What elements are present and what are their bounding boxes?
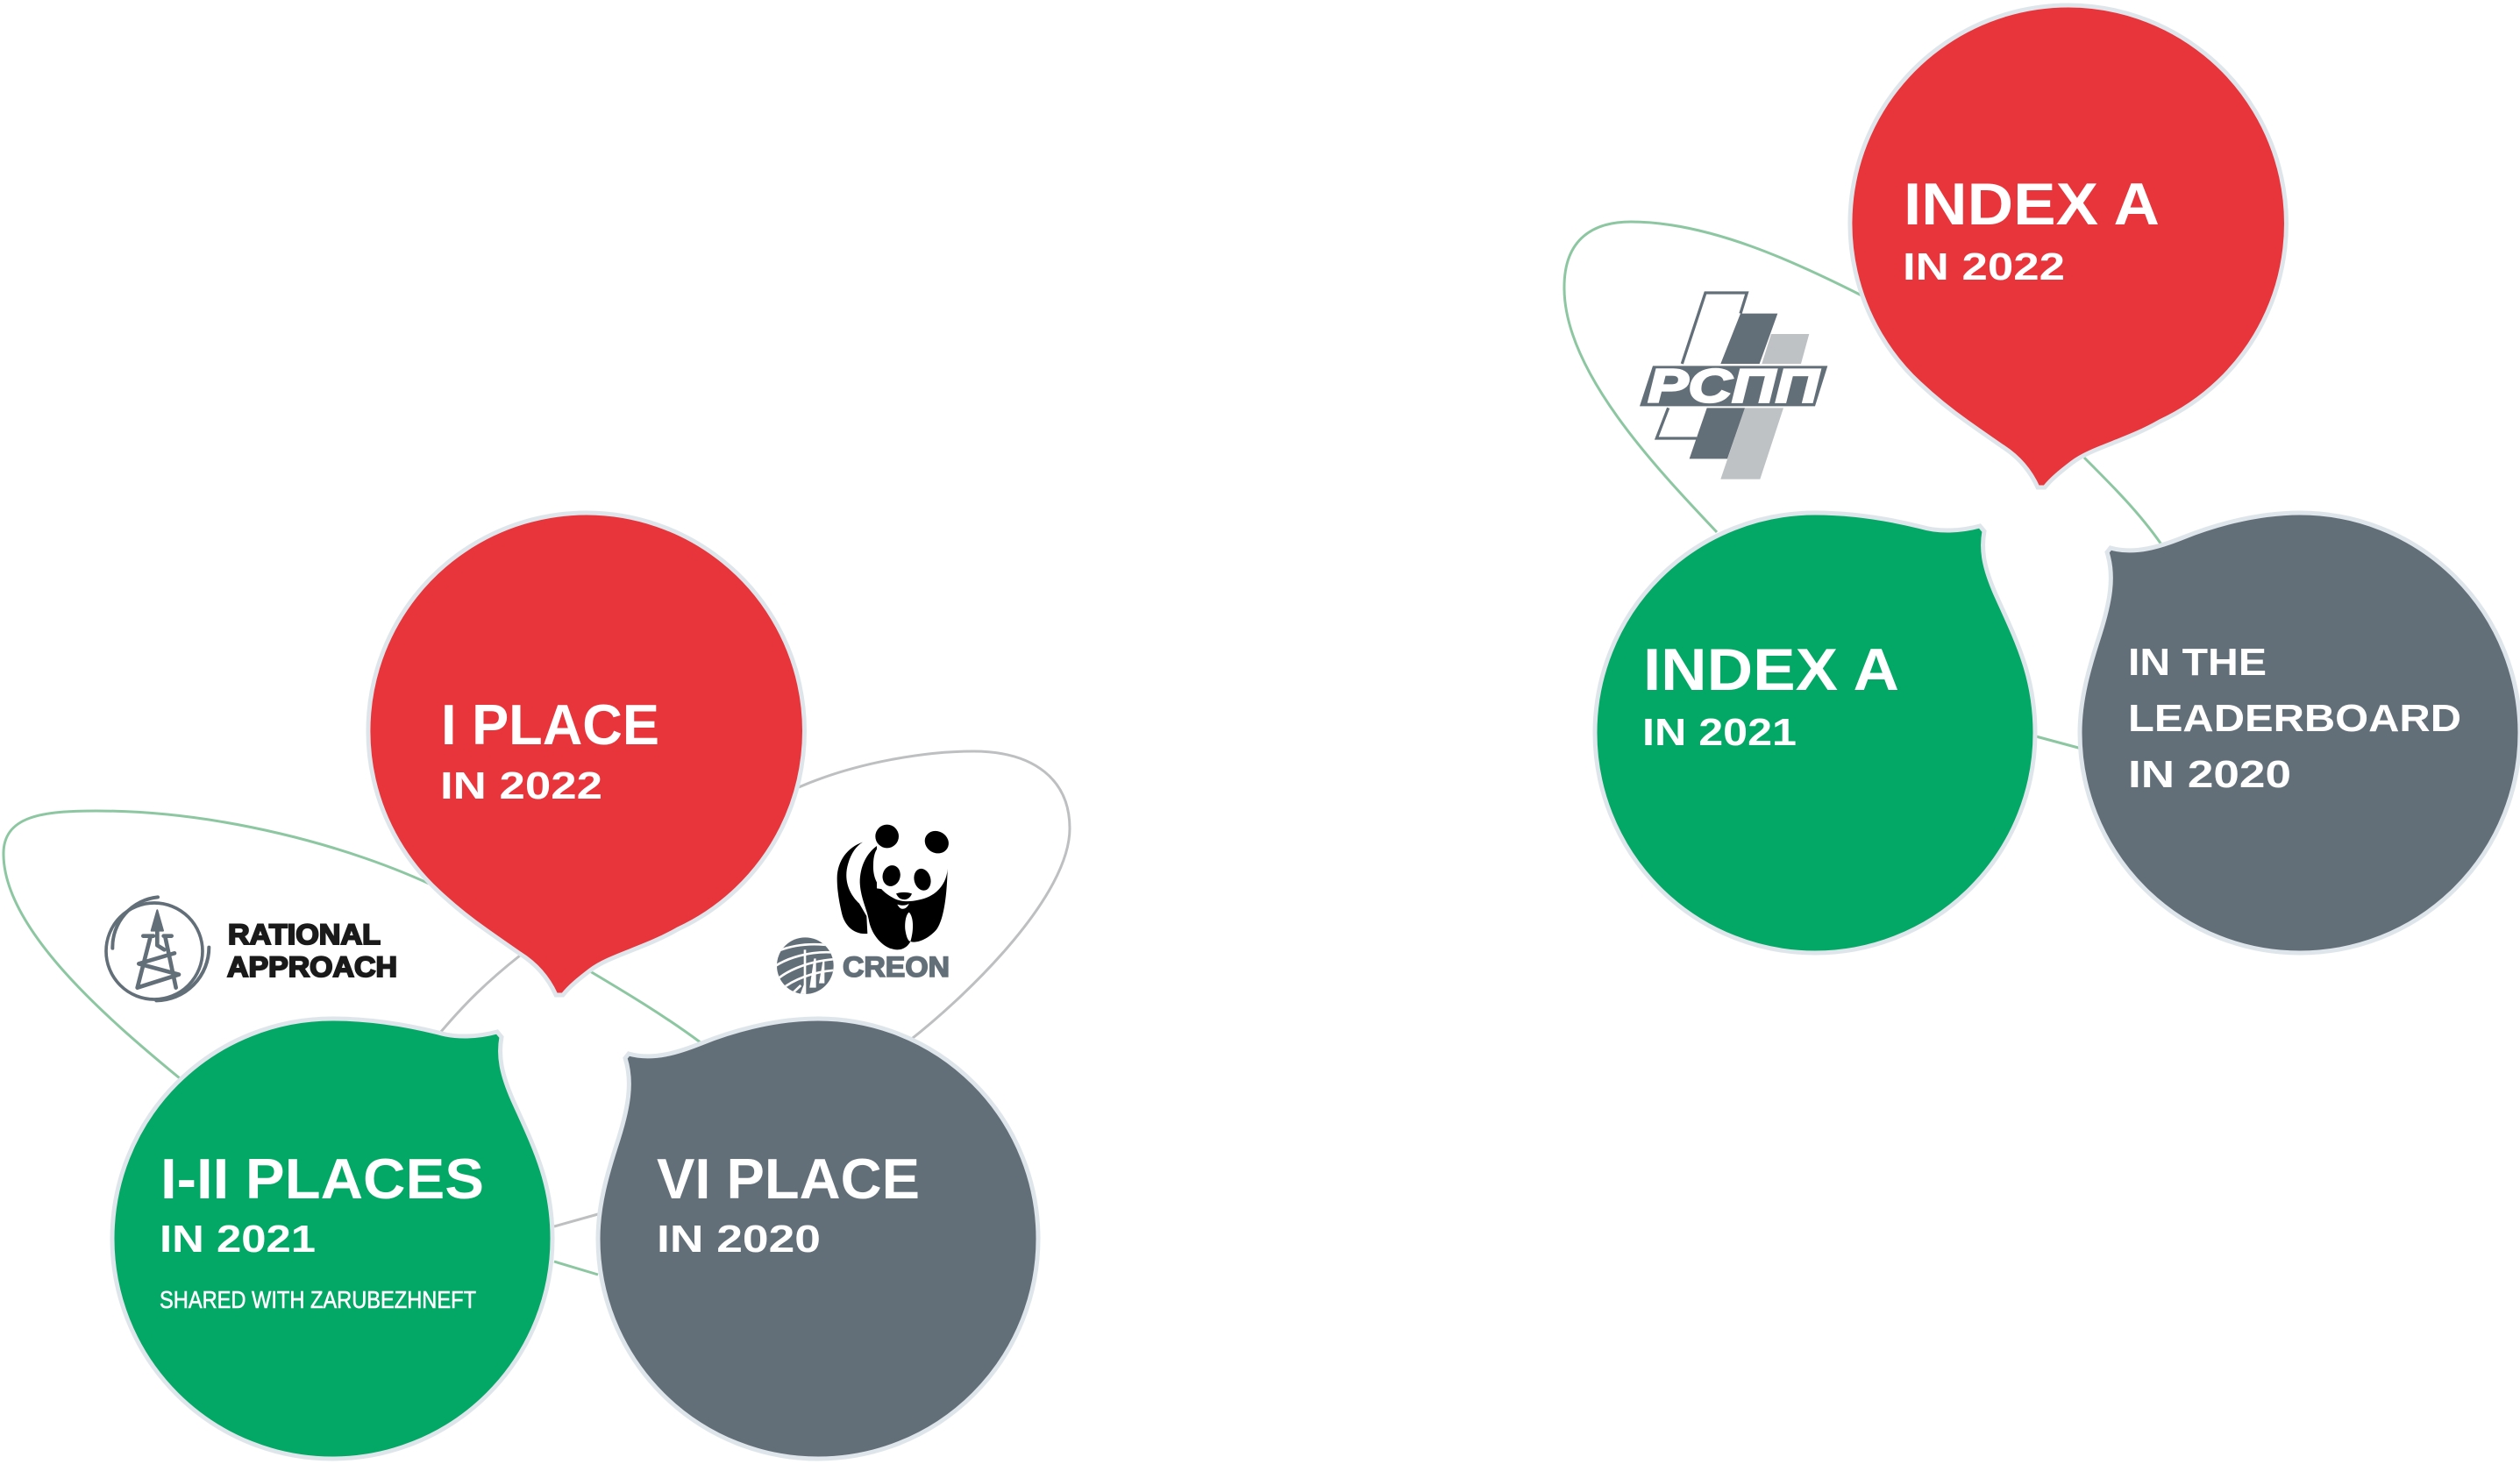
text: I-II places 2021: I-II PLACES	[160, 1147, 484, 1211]
icon: oil derrick in circle	[106, 897, 209, 1000]
text: Index A 2022	[1903, 171, 2160, 288]
logo: WWF panda	[837, 825, 953, 949]
panel: left ranking group	[4, 513, 1070, 1459]
connector: green line red to grey	[2084, 458, 2161, 544]
logo: Rational Approach: APPROACH	[227, 951, 397, 983]
text: VI place 2020: IN 2020	[657, 1218, 821, 1261]
text: I place 2022: IN 2022	[440, 764, 602, 807]
text: Index A 2021	[1642, 636, 1899, 754]
text: VI place 2020: VI PLACE	[657, 1147, 920, 1211]
text: Index A 2022: IN 2022	[1903, 245, 2065, 288]
text: I place 2022: I PLACE	[441, 693, 659, 757]
logo: CREON: CREON	[843, 951, 950, 983]
connector: green line green to grey	[2036, 736, 2082, 749]
text: I-II places 2021: IN 2021	[160, 1218, 316, 1261]
text: Index A 2022: INDEX A	[1904, 171, 2160, 238]
panel: right ranking group	[1564, 5, 2520, 953]
text: Index A 2021: INDEX A	[1643, 636, 1899, 703]
text: I-II places 2021: SHARED WITH ZARUBEZHNEFT	[160, 1286, 476, 1313]
text: I place 2022	[440, 693, 659, 807]
text: VI place 2020	[657, 1147, 920, 1261]
drop: red 2022	[1850, 5, 2286, 487]
logo: RSPP: РСПП	[1648, 361, 1820, 413]
text: Index A 2021: IN 2021	[1642, 711, 1797, 754]
text: in the leaderboard 2020	[2128, 641, 2461, 796]
icon: CREON globe	[777, 937, 834, 994]
connector: green line red to grey	[590, 971, 701, 1043]
drop: red 2022	[368, 513, 804, 995]
connector: green loop from green drop to red drop	[4, 811, 438, 1078]
logo: CREON	[774, 935, 950, 997]
text: in the leaderboard 2020: LEADERBOARD	[2128, 697, 2461, 740]
connector: green line green to grey	[554, 1261, 598, 1275]
logo: RSPP	[1640, 293, 1827, 480]
connector: grey line red to green	[440, 956, 520, 1033]
drop: grey 2020	[2080, 513, 2520, 953]
text: in the leaderboard 2020: IN 2020	[2128, 753, 2291, 796]
drop: green 2021	[112, 1019, 552, 1459]
logo: Rational Approach	[106, 897, 397, 1000]
connector: grey line green to grey	[554, 1214, 598, 1226]
text: I-II places 2021	[160, 1147, 484, 1313]
logo: Rational Approach: RATIONAL	[228, 919, 381, 950]
connector: green loop from green drop to red drop	[1564, 222, 1863, 532]
drop: grey 2020	[598, 1019, 1038, 1459]
connector: grey loop from red drop to grey drop	[799, 751, 1070, 1041]
text: in the leaderboard 2020: IN THE	[2128, 641, 2267, 684]
drop: green 2021	[1595, 513, 2035, 953]
